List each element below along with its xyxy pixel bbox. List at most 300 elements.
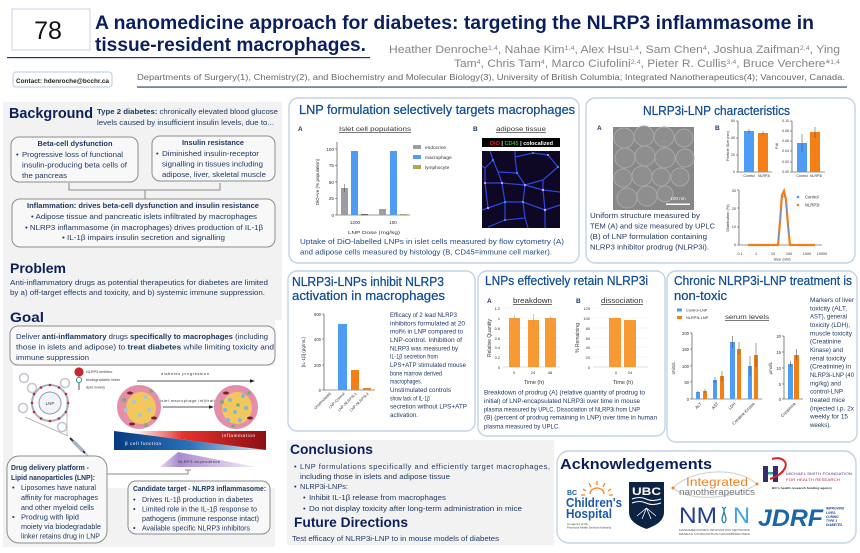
chart: serum levels: AST <box>710 401 720 410</box>
chart: particle size: 20 <box>731 153 735 157</box>
chart: size distribution: 1000 <box>803 252 811 256</box>
chart: islet cell populations: 0 <box>331 213 334 218</box>
chart: size distribution: Control <box>805 194 819 200</box>
heading: problem: Problem <box>10 260 66 276</box>
chart: creatinine: 5 <box>779 382 782 387</box>
text: efficacy description: IL-1β secretion from <box>390 354 438 361</box>
chart: breakdown: 0 <box>498 365 501 370</box>
chart: PDI: 0.06 <box>782 139 789 143</box>
chart: breakdown: Time (h) <box>524 380 544 386</box>
authors: 2,4 <box>631 59 641 66</box>
box: beta-cell dysfunction: Beta-cell dysfunction <box>38 139 113 148</box>
chart: IL-1 beta <box>301 312 375 412</box>
conclusions list: Inhibit IL-1β release from macrophages <box>309 493 446 502</box>
chart: breakdown: Relative Quantity <box>487 318 493 357</box>
chart: serum levels: 150 <box>682 347 690 352</box>
chart: islet cell populations: lymphocyte <box>425 165 450 171</box>
text: efficacy description: mol% in LNP compared to <box>390 329 463 336</box>
box: insulin resistance: Diminished insulin-receptor <box>162 149 260 158</box>
illustration: islet before <box>117 385 161 429</box>
illustration: lipid nanoparticle <box>18 374 70 432</box>
panel heading <box>292 274 446 303</box>
box: drug delivery platform: Drug delivery platform - <box>11 463 89 472</box>
logo: JDRF: CURING <box>826 515 839 519</box>
box: drug delivery platform: • <box>12 512 15 522</box>
illustration: prodrug legend: biodegradable linker <box>86 378 121 382</box>
chart: dissociation: 60 <box>586 336 591 341</box>
authors: , Joshua Zaifman <box>707 44 800 56</box>
chart: creatinine <box>768 334 803 418</box>
logo: UBC <box>629 482 664 529</box>
title: tissue-resident macrophages. <box>95 35 366 56</box>
heading: background: Background <box>9 106 93 122</box>
caption: plasma measured by UPLC. Dissociation of NLRP3i from LNP <box>484 406 640 413</box>
illustration: islet after <box>214 385 258 429</box>
conclusions list: including those in islets and adipose tissue <box>300 472 450 481</box>
chart: size distribution: 30 <box>732 189 736 193</box>
chart: PDI: 0.10 <box>782 119 789 123</box>
chart: breakdown <box>487 298 560 386</box>
chart: breakdown: 1 <box>498 316 500 321</box>
box: candidate target: Limited role in the IL-1β response to <box>142 504 257 514</box>
text: type 2 diabetes <box>97 107 278 127</box>
heading: future directions: Future Directions <box>294 514 408 530</box>
box: goal: immune suppression <box>16 353 89 362</box>
logo: JDRF: TYPE 1 <box>826 519 837 523</box>
authors: , Nahae Kim <box>498 44 565 56</box>
caption: Breakdown of prodrug (A) (relative quantity of prodrug to <box>484 390 645 397</box>
chart: dissociation: B <box>576 298 581 305</box>
chart: IL-1 beta: LNP-Control <box>328 392 346 409</box>
chart: islet cell populations: 25 <box>329 196 334 201</box>
authors: , Sam Chen <box>639 44 703 56</box>
illustration: prodrug legend: lipid moiety <box>86 386 105 390</box>
chart: creatinine: µmol/L <box>768 361 773 374</box>
chart: islet cell populations <box>298 126 452 236</box>
conclusions list: NLRP3i-LNPs: <box>300 482 348 491</box>
chart: islet cell populations: Islet cell populations <box>339 126 412 133</box>
chart: dissociation <box>575 298 648 386</box>
box: insulin resistance: signalling in tissues including <box>162 160 263 168</box>
box: candidate target: Drives IL-1β production in diabetes <box>142 495 253 504</box>
conclusions list: Do not display toxicity after long-term administration in mice <box>309 504 522 513</box>
box: candidate target <box>128 481 270 534</box>
chart: IL-1 beta: 600 <box>314 312 322 317</box>
chart: PDI: Control <box>796 174 808 178</box>
logo: Michael Smith Foundation: MICHAEL SMITH FOUNDATION <box>786 472 852 476</box>
logo: NMIN: N <box>733 503 750 528</box>
chart: islet cell populations: endocrine <box>425 145 446 151</box>
panel: LNPs retain NLRP3i <box>478 271 665 436</box>
chart: PDI: PdI <box>775 143 779 149</box>
caption: initial) of LNP-encapsulated NLRP3i over time in mouse <box>484 398 640 405</box>
chart: serum levels <box>671 314 770 426</box>
box: drug delivery platform: Prodrug with lipid <box>21 512 79 522</box>
authors: , Chris Tam <box>481 58 541 70</box>
box: candidate target: • <box>133 524 136 532</box>
text: efficacy description: bone marrow derived <box>390 370 442 377</box>
logo: BC Children's Hospital: An agency of the <box>567 522 588 526</box>
arrow: diabetes progression: diabetes progression <box>161 371 209 376</box>
chart: particle size: B <box>715 125 720 132</box>
box: goal: those in islets and adipose) to treat diabetes while limiting toxicity and <box>16 342 274 352</box>
chart: IL-1 beta: [IL-1β] (pg/mL) <box>301 336 306 367</box>
box: insulin resistance: • <box>156 149 159 158</box>
chart: IL-1 beta: LNP-NLRP3i-1 <box>337 392 358 412</box>
text: toxicity markers: Kinase) and <box>810 347 843 354</box>
chart: IL-1 beta: 0 <box>319 388 322 393</box>
box: candidate target: pathogens (immune response intact) <box>142 514 259 523</box>
chart: serum levels: LDH <box>727 401 737 411</box>
text: toxicity markers <box>809 297 855 429</box>
affiliations: Departments of Surgery(1), Chemistry(2), and Biochemistry and Molecular Biology(3), University of British Columbia; Integrated Nanotherapeutics(4); Vancouver, Canada. <box>137 73 845 82</box>
box: beta-cell dysfunction: • <box>16 150 19 159</box>
chart: size distribution: 10 <box>732 225 736 229</box>
chart legend <box>677 308 709 320</box>
image: TEM micrograph: 100 nm <box>670 196 686 201</box>
box: beta-cell dysfunction <box>11 137 138 182</box>
chart: islet cell populations: A <box>298 126 303 133</box>
chart: creatinine: 15 <box>776 350 782 355</box>
chart: serum levels: 100 <box>682 364 690 369</box>
authors: , Marco Ciufolini <box>545 58 631 70</box>
conclusions list: • <box>303 504 306 513</box>
box: candidate target: • <box>133 495 136 504</box>
text: toxicity markers: AST), general <box>810 314 848 321</box>
authors: , Pieter R. Cullis <box>641 58 727 70</box>
box: drug delivery platform: moiety via biodegradable <box>21 522 101 531</box>
chart: breakdown: 24 <box>531 370 536 375</box>
authors: 4 <box>703 45 707 52</box>
conclusions list: • <box>294 482 297 491</box>
title: A nanomedicine approach for diabetes: targeting the NLRP3 inflammasome in <box>95 13 814 34</box>
text: toxicity markers: renal toxicity <box>810 355 847 362</box>
chart: size distribution: NLRP3i <box>805 202 819 208</box>
chart: serum levels: Creatine Kinase <box>731 401 756 426</box>
chart: dissociation: 0 <box>588 365 591 370</box>
triangle: NLRP3 dependence: NLRP3 dependence <box>178 459 220 464</box>
chart: size distribution: Distribution (%) <box>725 204 730 232</box>
caption: and adipose cells measured by histology (B, CD45=immune cell marker). <box>300 248 552 256</box>
chart legend: Control-LNP <box>686 308 708 312</box>
text: problem: Anti-inflammatory drugs as potential therapeutics for diabetes are limited <box>10 278 268 287</box>
text: toxicity markers: (Creatinine) in <box>810 364 851 371</box>
box: goal: Deliver anti-inflammatory drugs specifically to macrophages (including <box>16 332 268 341</box>
box: inflammation: Inflammation: drives beta-cell dysfunction and insulin resistance <box>27 201 259 210</box>
panel heading: NLRP3i-LNPs inhibit NLRP3 <box>292 274 444 289</box>
text: future directions: Test efficacy of NLRP3i-LNP to in mouse models of diabetes <box>292 534 499 543</box>
panel: NLRP3i-LNP characteristics <box>586 98 855 263</box>
caption <box>590 211 716 252</box>
contact box <box>13 72 112 87</box>
caption: (B) (percent of prodrug remaining in LNP) over time in human <box>484 415 657 422</box>
chart: islet cell populations: macrophage <box>425 155 452 161</box>
logo: NMIN <box>679 503 750 536</box>
chart: size distribution: 0.1 <box>737 252 743 256</box>
logo: Integrated Nanotherapeutics: nanotherapeutics <box>679 487 756 497</box>
image: TEM micrograph <box>597 125 694 210</box>
box: inflammation <box>12 199 275 247</box>
chart: PDI: 0.00 <box>782 170 789 174</box>
authors: 1,4 <box>830 59 840 66</box>
logo: BC Children's Hospital: BC <box>567 490 577 497</box>
chart: particle size <box>715 119 772 178</box>
chart: islet cell populations: DiO+ve (% population) <box>315 158 320 205</box>
image: TEM micrograph: A <box>597 125 602 132</box>
chart: dissociation: 120 <box>584 306 591 311</box>
text: efficacy description: LPS+ATP stimulated mouse <box>390 362 466 369</box>
chart: IL-1 beta: LNP-NLRP3i-2 <box>349 392 370 412</box>
chart: breakdown: 0.4 <box>495 345 501 350</box>
logo: BC Children's Hospital <box>566 481 622 530</box>
gradient chart: beta cell function and inflammation: β cell function <box>125 441 161 446</box>
chart: dissociation: dissociation <box>601 298 643 305</box>
heading: conclusions: Conclusions <box>290 441 373 457</box>
chart: particle size: 60 <box>731 119 735 123</box>
text: efficacy description: show lack of IL-1β <box>390 395 430 402</box>
arrow: islet macrophage infiltration: islet macrophage infiltration <box>160 398 220 403</box>
chart: PDI: NLRP3i <box>810 174 822 178</box>
chart: PDI: 0.02 <box>782 160 789 164</box>
chart: breakdown: 0.8 <box>495 326 500 331</box>
arrow: diabetes progression <box>137 371 255 383</box>
panel heading: LNP formulation selectively targets macrophages <box>299 102 575 117</box>
chart: serum levels: 50 <box>684 380 690 385</box>
poster number box <box>12 9 90 50</box>
authors: , Ying <box>810 44 840 56</box>
chart: particle size: 0 <box>733 170 735 174</box>
chart: creatinine: 0 <box>779 397 782 402</box>
logo: JDRF: DIABETES. <box>826 523 843 527</box>
panel: LNP formulation <box>289 98 579 263</box>
logo: UBC: UBC <box>632 486 661 498</box>
box: candidate target: Available specific NLRP3 inhibitors <box>142 524 250 532</box>
logo: Michael Smith Foundation <box>763 458 852 490</box>
logo: JDRF: IMPROVING <box>826 506 845 510</box>
logo: NMIN: NANOMEDICINES INNOVATION NETWORK <box>679 528 750 532</box>
authors: Tam <box>454 58 475 70</box>
chart: islet cell populations: 150 <box>389 220 397 225</box>
chart: serum levels: 200 <box>682 331 690 336</box>
logo: JDRF: LIVES. <box>826 511 836 515</box>
chart: particle size: Control <box>743 174 755 178</box>
chart: size distribution: 10000 <box>817 252 827 256</box>
box: candidate target: • <box>133 504 136 514</box>
panel heading: non-toxic <box>674 288 728 303</box>
box: goal <box>10 326 275 365</box>
chart: size distribution: 10 <box>771 252 775 256</box>
text: efficacy description: Efficacy of 2 lead NLRP3 <box>390 312 457 319</box>
text: efficacy description: NLRP3 was measured by <box>390 345 459 352</box>
chart: breakdown: 48 <box>548 370 552 375</box>
chart legend: NLRP3i-LNP <box>686 315 709 320</box>
chart: serum levels: serum levels <box>725 314 770 321</box>
chart: size distribution: 100 <box>786 252 792 256</box>
chart: size distribution: 20 <box>732 207 736 211</box>
chart: dissociation: % Remaining <box>575 323 581 353</box>
caption: Uniform structure measured by <box>590 211 700 220</box>
text: toxicity markers: NLRP3i-LNP (40 <box>810 372 854 379</box>
chart: particle size: Particle Size (nm) <box>726 130 730 161</box>
authors: 1,4 <box>488 45 498 52</box>
logo: Michael Smith Foundation: BC's health research funding agency <box>772 486 832 490</box>
authors: 1,4 <box>565 45 575 52</box>
box: insulin resistance: Insulin resistance <box>182 138 244 147</box>
image: adipose tissue histology: B <box>473 126 478 133</box>
image: adipose tissue histology: adipose tissue <box>496 126 546 133</box>
box: drug delivery platform: Lipid nanoparticles (LNP): <box>11 473 95 482</box>
chart: breakdown: 0 <box>513 370 516 375</box>
triangle: NLRP3 dependence <box>160 452 256 467</box>
chart: PDI <box>775 119 825 178</box>
chart: serum levels: ALT <box>694 401 703 410</box>
authors: , Bruce Verchere* <box>736 58 831 70</box>
chart: size distribution: Size (nm) <box>773 256 791 262</box>
text: type 2 diabetes: levels caused by insufficient insulin levels, due to... <box>97 118 274 127</box>
authors: 4 <box>541 59 545 66</box>
text: toxicity markers: mg/kg) and <box>810 380 841 387</box>
chart: IL-1 beta: 400 <box>314 337 322 342</box>
poster number box: 78 <box>34 17 62 45</box>
text: efficacy description: secretion without LPS+ATP <box>390 404 468 411</box>
icon: syringe and pointer lines <box>25 400 191 474</box>
box: inflammation: • IL-1β impairs insulin secretion and signalling <box>62 233 225 242</box>
caption: Uptake of DiO-labelled LNPs in islet cells measured by flow cytometry (A) <box>300 237 565 246</box>
conclusions list <box>294 462 550 513</box>
text: toxicity markers: Markers of liver <box>810 297 855 304</box>
caption: plasma measured by UPLC. <box>484 423 560 430</box>
authors: , Alex Hsu <box>574 44 629 56</box>
chart: dissociation: 20 <box>586 355 591 360</box>
box: drug delivery platform <box>7 456 107 543</box>
panel heading: NLRP3i-LNP characteristics <box>643 103 790 118</box>
panel: conclusions and future directions <box>287 440 554 545</box>
conclusions list: • <box>303 493 306 502</box>
text: toxicity markers: treated mice <box>810 397 845 404</box>
chart: PDI: 0.04 <box>782 149 789 153</box>
logo: NMIN: RÉSEAU D'INNOVATION NANOMÉDECINES <box>679 531 750 536</box>
chart: IL-1 beta: Unstimulated <box>313 392 332 410</box>
text: efficacy description: Unstimulated controls <box>390 387 452 394</box>
chart: dissociation: 0 <box>615 370 618 375</box>
logo: Integrated Nanotherapeutics <box>672 472 758 497</box>
chart: size distribution: 0 <box>734 243 736 247</box>
text: type 2 diabetes: Type 2 diabetes: chronically elevated blood glucose <box>97 107 278 116</box>
authors: 3,4 <box>726 59 737 66</box>
chart: breakdown: 1.2 <box>495 306 500 311</box>
text: problem: by a) off-target effects and toxicity, and b) systemic immune suppression. <box>10 288 265 297</box>
caption <box>300 237 565 256</box>
chart: size distribution: 1 <box>755 252 757 256</box>
chart: PDI: 0.08 <box>782 129 789 133</box>
chart: islet cell populations: 1200 <box>350 220 361 225</box>
logo: Integrated Nanotherapeutics: Integrated <box>686 475 748 489</box>
caption: TEM (A) and size measured by UPLC <box>590 222 716 230</box>
box: beta-cell dysfunction: Progressive loss of functional <box>22 150 123 159</box>
panel: NLRP3i-LNPs inhibit activation <box>288 271 475 431</box>
authors: Heather Denroche <box>389 44 479 56</box>
chart: size distribution <box>725 189 827 262</box>
image: adipose tissue histology: DiO | CD45 | colocalized <box>490 141 553 147</box>
chart: creatinine: 10 <box>776 366 782 371</box>
logo: NMIN: NM <box>679 503 717 528</box>
arrow: islet macrophage infiltration <box>160 398 220 409</box>
panel heading: activation in macrophages <box>292 288 446 303</box>
caption: NLRP3 inhibitor prodrug (NLRP3i). <box>590 242 709 252</box>
connector bracket <box>69 183 220 199</box>
text: toxicity markers: muscle toxicity <box>810 330 853 337</box>
box: inflammation: • NLRP3 inflammasome (in macrophages) drives production of IL-1β <box>25 223 264 232</box>
box: inflammation: • Adipose tissue and pancreatic islets infiltrated by macrophages <box>31 212 257 221</box>
heading: goal: Goal <box>10 309 44 325</box>
text: toxicity markers: weeks). <box>809 422 831 429</box>
chart: creatinine: 20 <box>776 334 782 339</box>
text: toxicity markers: (injected i.p. 2x <box>810 405 855 412</box>
text: toxicity markers: weekly for 15 <box>809 414 848 421</box>
chart: dissociation: 24 <box>628 370 633 375</box>
box: insulin resistance <box>152 136 275 181</box>
panel: acknowledgements <box>557 451 856 543</box>
panel: background, problem and goal <box>3 102 282 547</box>
box: drug delivery platform: linker retains drug in LNP <box>21 532 100 540</box>
text: toxicity markers: toxicity (ALT, <box>810 305 847 312</box>
box: drug delivery platform: Liposomes have natural <box>21 483 96 492</box>
chart: breakdown: 0.6 <box>495 336 500 341</box>
text: efficacy description: activation. <box>390 412 418 419</box>
title <box>7 13 814 58</box>
illustration: prodrug legend: NLRP3 inhibitor <box>86 370 113 374</box>
panel heading: LNPs effectively retain NLRP3i <box>485 273 648 288</box>
box: drug delivery platform: affinity for macrophages <box>21 493 98 502</box>
authors: 4 <box>477 59 481 66</box>
box: drug delivery platform: and other myeloid cells <box>21 503 94 512</box>
text: efficacy description: macrophages. <box>390 379 422 386</box>
chart: IL-1 beta: 200 <box>314 363 322 368</box>
text: efficacy description: inhibitors formulated at 20 <box>390 320 465 327</box>
illustration: lipid nanoparticle: LNP <box>46 401 54 406</box>
logo: JDRF: JDRF <box>758 505 824 532</box>
text: efficacy description: LNP-control. Inhibition of <box>390 337 462 344</box>
chart: breakdown: A <box>487 298 492 305</box>
gradient chart: beta cell function and inflammation: inflammation <box>222 433 255 438</box>
caption <box>484 390 657 430</box>
chart: particle size: NLRP3i <box>758 174 770 178</box>
conclusions list: • <box>294 462 297 471</box>
text: efficacy description <box>390 312 468 419</box>
chart: dissociation: 80 <box>586 326 591 331</box>
chart: breakdown: breakdown <box>513 298 552 305</box>
logo: BC Children's Hospital: Children's <box>566 496 622 510</box>
box: insulin resistance: adipose, liver, skeletal muscle <box>162 170 266 179</box>
box: candidate target: Candidate target - NLRP3 inflammasome: <box>133 484 266 493</box>
logo: BC Children's Hospital: Hospital <box>566 507 612 521</box>
box: beta-cell dysfunction: the pancreas <box>22 171 67 180</box>
authors: 1,4 <box>629 45 639 52</box>
text: toxicity markers: toxicity (LDH), <box>810 322 850 329</box>
chart: serum levels: 0 <box>687 397 690 402</box>
panel: chronic treatment non-toxic <box>667 271 857 442</box>
box: beta-cell dysfunction: insulin-producing beta cells of <box>22 160 128 170</box>
heading: acknowledgements: Acknowledgements <box>560 456 712 473</box>
contact box: Contact: hdenroche@bcchr.ca <box>16 79 110 85</box>
chart: islet cell populations: 50 <box>329 180 334 185</box>
authors: 2,4 <box>800 45 810 52</box>
chart: serum levels: Units/L <box>671 361 676 375</box>
panel heading <box>674 273 852 303</box>
chart: dissociation: 40 <box>586 345 591 350</box>
authors <box>389 44 840 70</box>
logo: Michael Smith Foundation: FOR HEALTH RESEARCH <box>786 478 840 482</box>
